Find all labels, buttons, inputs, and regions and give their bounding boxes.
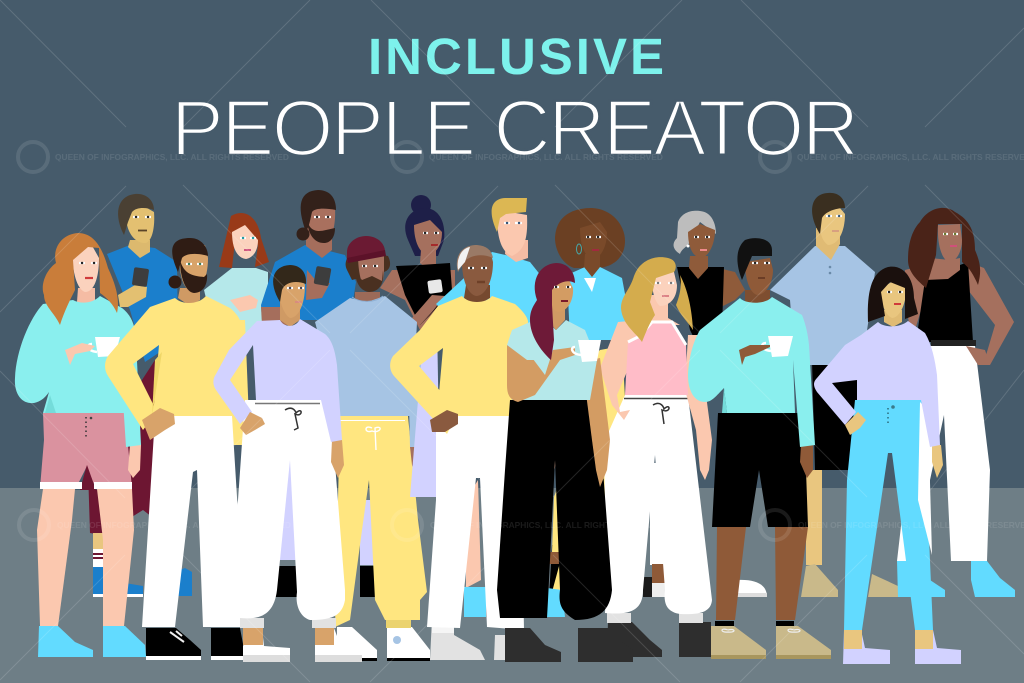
person: blond woman in pink halter with white trousers <box>600 257 712 657</box>
person: woman in pale teal tee with black trousers and maroon ponytail <box>497 263 633 662</box>
person: man in henley, back row <box>770 193 898 597</box>
person: bearded man in yellow sweater and white trousers <box>105 238 250 660</box>
person: woman in lavender sweater with white trousers <box>213 265 362 662</box>
person: yellow garment behind the front row <box>552 346 628 592</box>
person: man in blue scrubs, back row <box>88 194 192 597</box>
watermark logos and text: QUEEN OF INFOGRAPHICS, LLC. ALL RIGHTS RESERVED <box>55 152 289 162</box>
watermark logos and text: QUEEN OF INFOGRAPHICS, LLC. ALL RIGHTS RESERVED <box>430 520 664 530</box>
person: grey-haired woman in black, back row <box>643 211 767 597</box>
person: red-haired woman, back row <box>204 213 269 335</box>
title: INCLUSIVE <box>368 28 664 85</box>
person: afro woman in light blue, back row <box>549 208 628 597</box>
person: woman with long brown hair and white trousers <box>897 208 1015 597</box>
person: man in beanie, blue sweater and yellow trousers <box>315 236 430 661</box>
watermark logos and text: QUEEN OF INFOGRAPHICS, LLC. ALL RIGHTS RESERVED <box>57 520 291 530</box>
person: woman in mint sweater with cup and pink shorts <box>15 233 146 657</box>
title <box>171 28 859 172</box>
person: blond man in light blue, back row <box>436 198 550 617</box>
title: PEOPLE CREATOR <box>171 83 859 172</box>
person: older man in yellow sweater and white trousers <box>390 245 528 660</box>
person: woman in lavender sweater with bright blue jeans <box>814 267 961 664</box>
person: bearded man in blue, back row <box>261 190 378 597</box>
watermark logos and text: QUEEN OF INFOGRAPHICS, LLC. ALL RIGHTS RESERVED <box>797 152 1024 162</box>
watermark logos and text: QUEEN OF INFOGRAPHICS, LLC. ALL RIGHTS RESERVED <box>429 152 663 162</box>
person: woman with bun and black top, back row <box>380 195 455 330</box>
person: man in mint sweater with cup and black shorts <box>688 238 831 659</box>
watermark logos and text <box>18 142 1024 540</box>
